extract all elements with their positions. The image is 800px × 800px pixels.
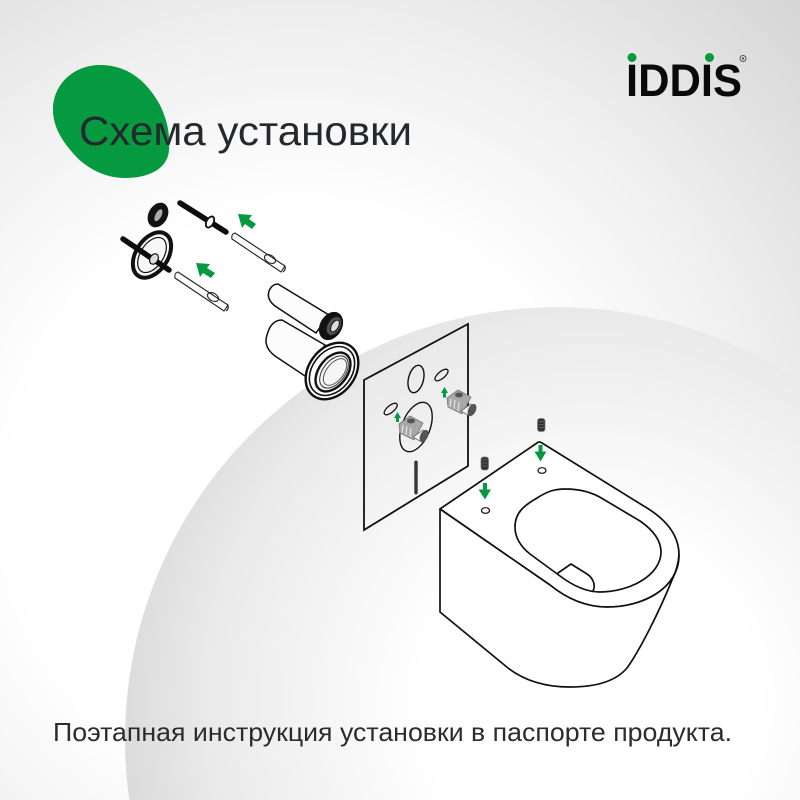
icon: left screw (481, 457, 488, 470)
icon: right wall fitting (447, 390, 478, 417)
icon: lower pin (175, 272, 228, 311)
icon: mounting plate with bolt (123, 225, 179, 285)
background circle (125, 307, 800, 800)
icon: right screw (538, 418, 545, 432)
icon: right hole (538, 468, 546, 473)
green blob behind title (53, 65, 169, 178)
icon: upper pin (232, 233, 285, 272)
icon: nut (144, 199, 172, 231)
arrow: left fitting (394, 412, 401, 422)
arrow: lower pin (196, 263, 215, 278)
arrow: right fitting (441, 387, 448, 398)
icon: left wall fitting (399, 416, 430, 443)
icon: drain pipe small (268, 284, 348, 344)
arrow: right screw (534, 445, 546, 462)
arrow: left screw (478, 483, 491, 500)
title: Схема установки (79, 108, 412, 154)
icon: drain pipe large with flange (266, 320, 369, 410)
arrow: upper pin (238, 214, 256, 229)
toilet bowl (440, 442, 679, 687)
caption: Поэтапная инструкция установки в паспорте продукта. (53, 717, 732, 747)
icon: left hole (482, 508, 490, 513)
icon: upper bolt (180, 203, 226, 232)
logo: IDDIS: IDDIS (626, 55, 742, 106)
panel: installation plate (364, 324, 468, 530)
